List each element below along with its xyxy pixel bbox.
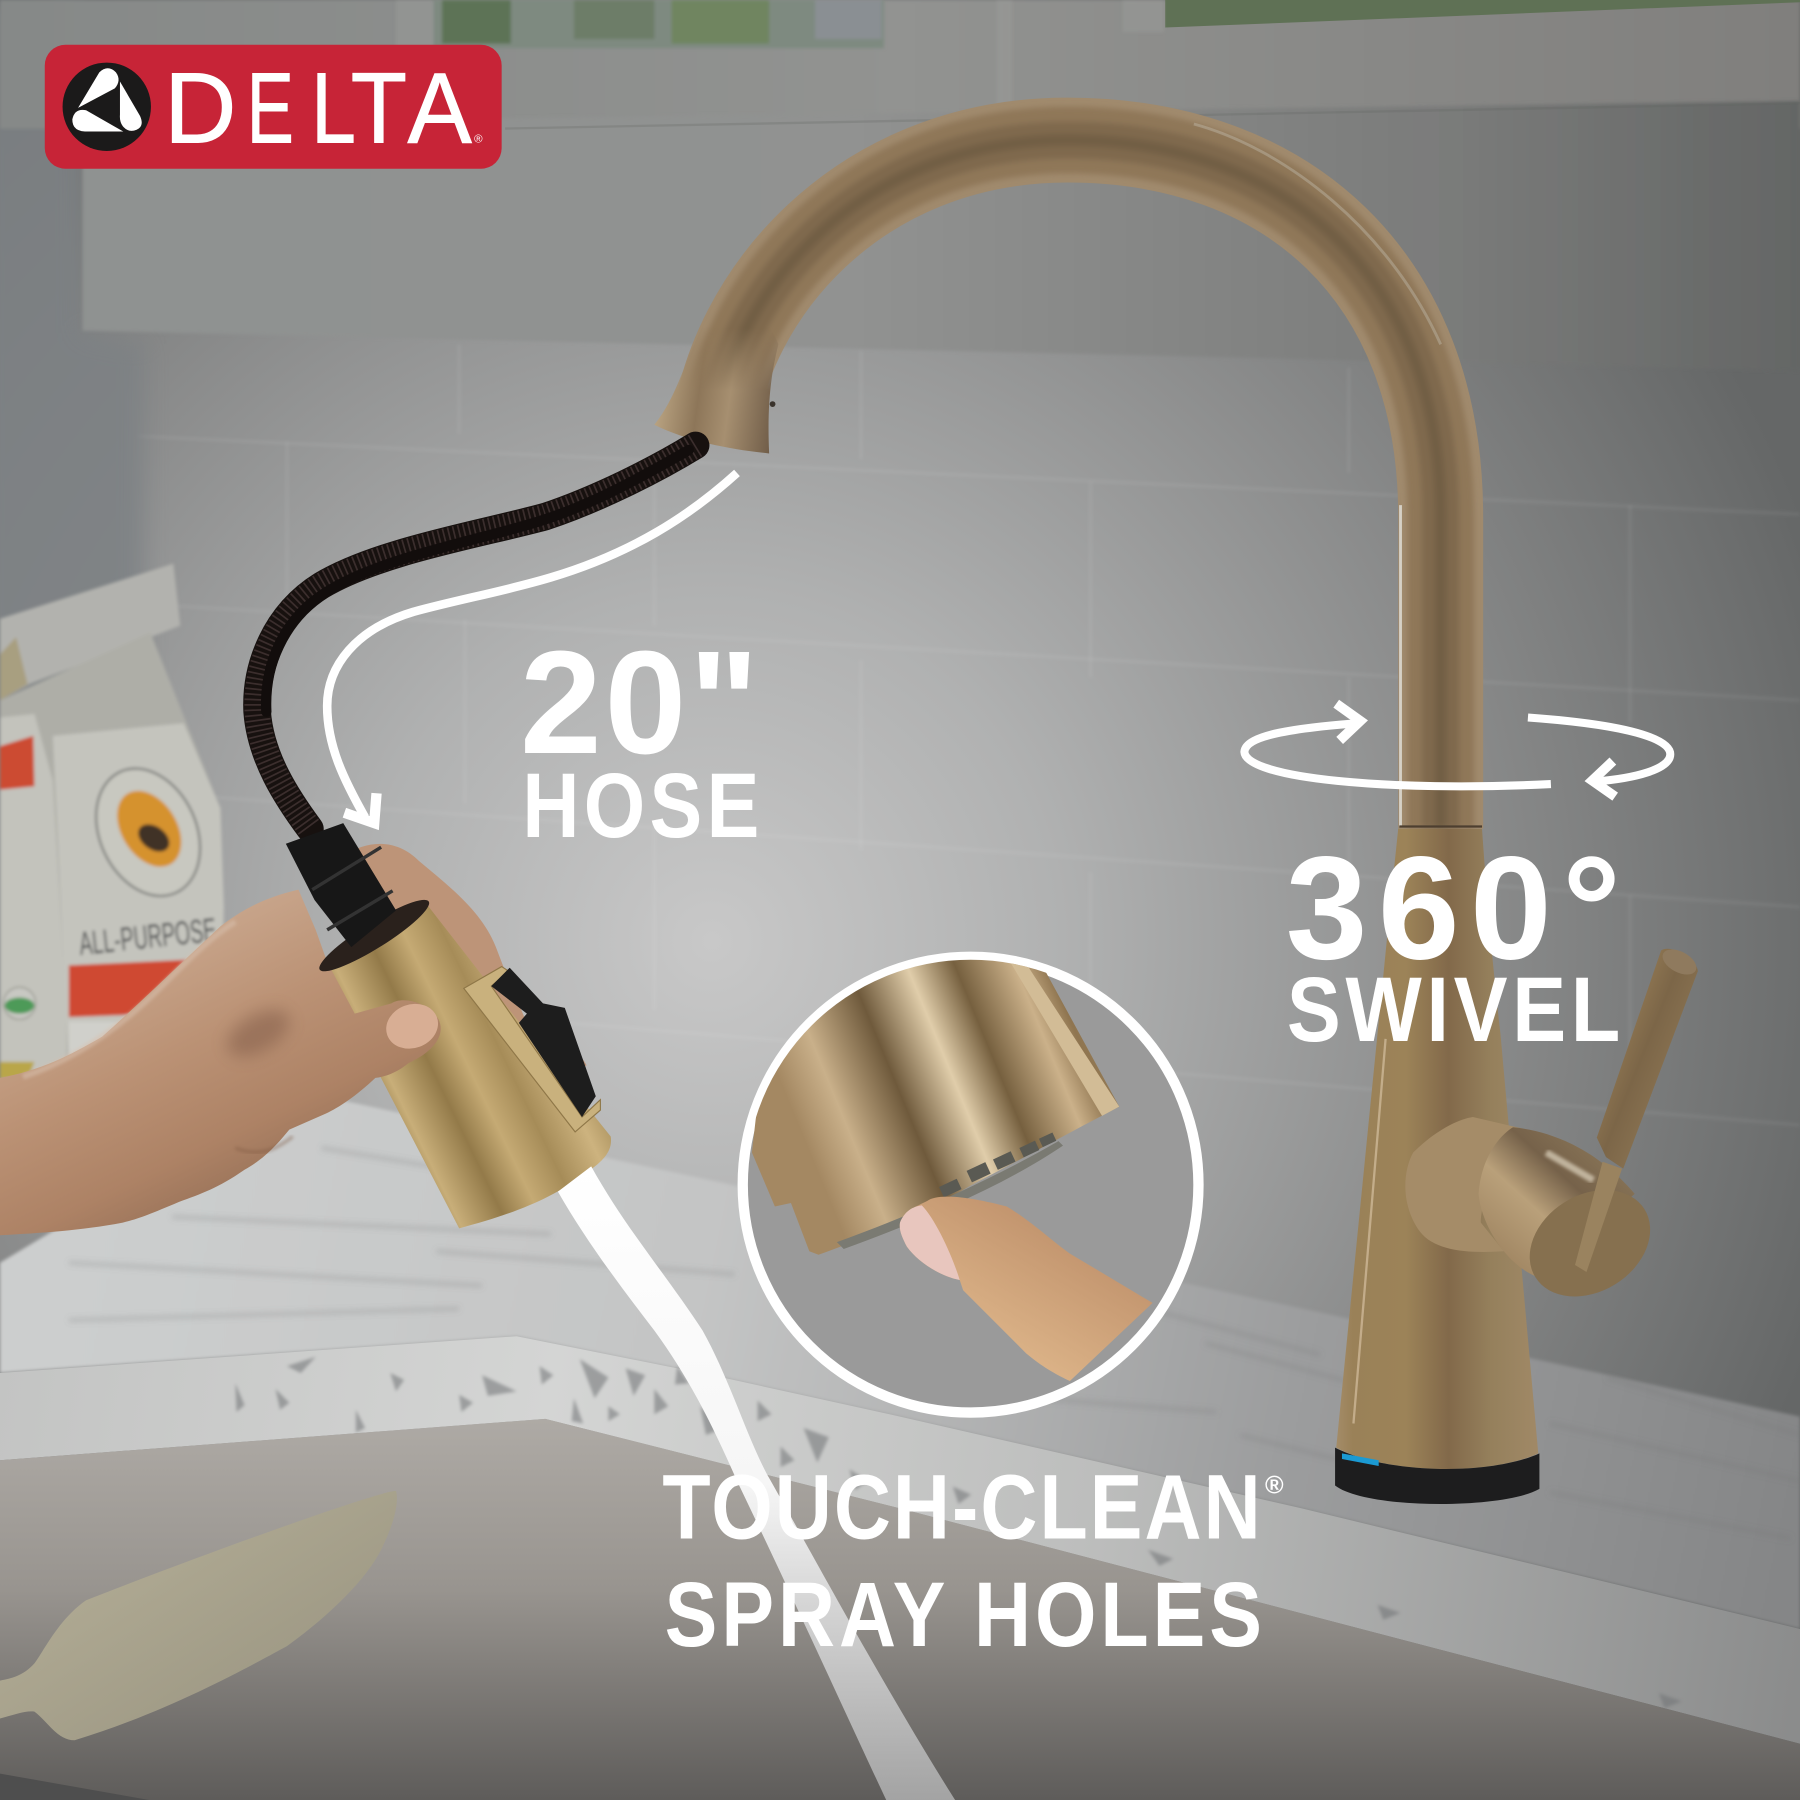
faucet touch base <box>1335 1448 1539 1504</box>
logo wordmark: T <box>351 53 407 164</box>
shelf top edge highlight <box>505 103 1800 129</box>
palm crease <box>235 1136 293 1152</box>
hand rim light <box>23 922 235 1077</box>
window trim <box>0 0 1800 129</box>
handle hub <box>1405 1117 1527 1252</box>
hand back fingers <box>344 844 587 1091</box>
label: 360 swivel <box>1286 827 1621 1061</box>
spray head ring <box>313 891 435 980</box>
countertop surface <box>0 1101 1800 1629</box>
label: touch-clean spray holes: SPRAY HOLES <box>665 1564 1262 1667</box>
lever lower <box>1575 1162 1622 1272</box>
spout tip <box>654 338 778 454</box>
faucet highlights <box>1194 124 1441 827</box>
inset background <box>743 957 1198 1413</box>
handle end disc <box>1510 1168 1670 1318</box>
inset magnifier: touch-clean spray holes <box>743 930 1198 1413</box>
connector ridge <box>312 847 393 930</box>
white arrow along hose <box>327 473 737 823</box>
status light <box>1342 1453 1379 1466</box>
faucet base body <box>1336 829 1538 1469</box>
logo emblem <box>63 63 151 151</box>
window mullions <box>396 0 1164 115</box>
label: 360 swivel: SWIVEL <box>1287 959 1620 1061</box>
handle highlight <box>1546 1153 1593 1180</box>
spray head plate <box>464 967 600 1132</box>
flour bag <box>0 564 230 1102</box>
left side wall <box>0 0 143 1148</box>
logo wordmark: D <box>164 53 236 164</box>
logo wordmark: A <box>408 53 472 164</box>
faucet spout arch <box>714 140 1441 829</box>
counter marble streaks <box>69 1148 1800 1538</box>
inset spray head <box>752 930 1153 1381</box>
hose connector <box>286 823 396 947</box>
swivel arrows <box>1244 704 1670 797</box>
inset fingernail <box>900 1205 960 1280</box>
logo registered mark: ® <box>474 133 483 145</box>
label: 20 inch hose: HOSE <box>522 754 759 857</box>
sink rim bottom-left <box>0 1774 149 1800</box>
logo badge <box>45 45 502 169</box>
lever cap <box>1658 944 1701 980</box>
label: touch-clean spray holes: ® <box>1265 1471 1284 1499</box>
label: 20 inch hose <box>520 621 759 857</box>
counter front edge <box>0 1336 1800 1744</box>
sink basin <box>0 1419 1800 1800</box>
hose <box>257 445 696 829</box>
window right <box>1165 0 1800 28</box>
label: touch-clean spray holes <box>662 1456 1284 1667</box>
logo wordmark: L <box>311 53 356 164</box>
cabinet shelf <box>83 101 1800 371</box>
window left <box>434 0 884 48</box>
water stream <box>558 1166 955 1800</box>
faucet body highlight <box>1353 1039 1386 1423</box>
inset finger <box>900 1197 1153 1381</box>
spatula <box>0 1491 397 1740</box>
thumb nail <box>380 997 444 1056</box>
spout tip hole <box>770 401 775 407</box>
handle cylinder <box>1479 1127 1635 1277</box>
faucet collar line <box>1399 826 1482 828</box>
logo wordmark: E <box>247 53 294 164</box>
inset spray holes <box>837 1141 1063 1249</box>
label: 20 inch hose: 20" <box>520 621 759 785</box>
hand shadow <box>219 1000 297 1066</box>
logo wordmark <box>164 53 472 164</box>
edge marble veining <box>235 1357 1682 1708</box>
lever upper <box>1597 949 1698 1169</box>
hand <box>0 890 441 1235</box>
spray head <box>323 905 611 1228</box>
label: 360 swivel: 360° <box>1286 827 1621 991</box>
spray head buttons <box>491 968 596 1117</box>
wall tile joints <box>138 344 1800 1125</box>
label: touch-clean spray holes: TOUCH-CLEAN <box>662 1456 1261 1559</box>
flour bag label: ALL-PURPOSE <box>77 912 218 963</box>
